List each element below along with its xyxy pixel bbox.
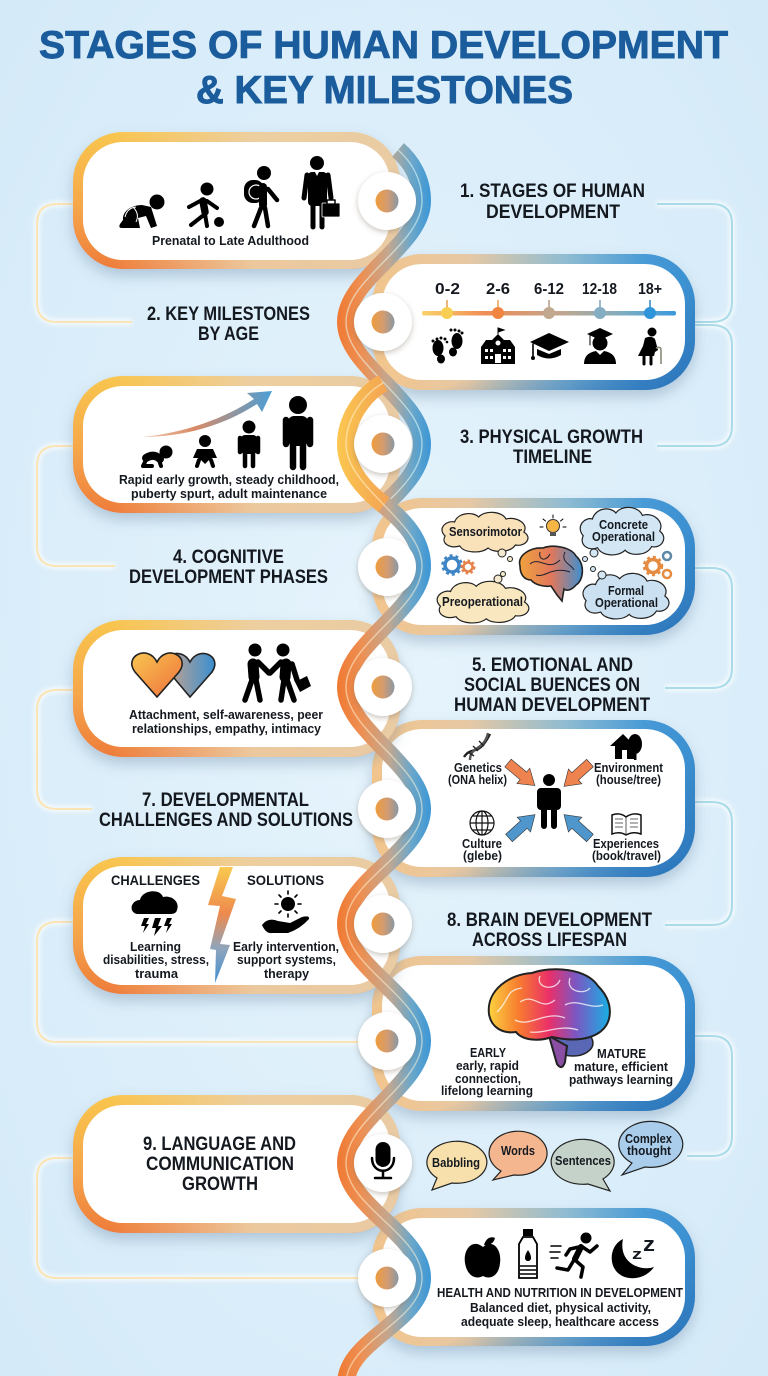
caption: Prenatal to Late Adulthood [152, 233, 309, 248]
bubble: babbling: Babbling [432, 1156, 480, 1170]
icon: moon and z [612, 1234, 655, 1278]
icon: elder with cane [638, 328, 661, 364]
arrows [502, 755, 597, 845]
icon: gears [442, 552, 671, 578]
icon: child with backpack [244, 166, 277, 226]
icon: handshake people [245, 644, 311, 700]
icon: runner [550, 1232, 597, 1277]
panel: influences [448, 733, 664, 863]
panel: emotional and social: relationships, empathy, intimacy [132, 721, 322, 736]
cloud: sensorimotor: Sensorimotor [449, 525, 522, 539]
heading: 4 cognitive development phases: DEVELOPMENT PHASES [129, 566, 328, 588]
icon: brain [520, 546, 582, 601]
icon: sun and hand [262, 891, 309, 933]
panel frames left [73, 132, 400, 1233]
panel: challenges and solutions: support systems, [237, 952, 336, 967]
text: Attachment, self-awareness, peer [129, 707, 323, 722]
heading: 1 stages of human development: DEVELOPMENT [486, 201, 620, 223]
heading: 5 emotional and social: 5. EMOTIONAL AND [472, 654, 633, 676]
icon: person [537, 774, 561, 826]
panel: influences: (glebe) [463, 849, 502, 863]
icon: graduation cap [530, 333, 569, 360]
heading: 3 physical growth timeline: TIMELINE [513, 446, 592, 468]
arrow: growth [142, 391, 272, 437]
bubble: words: Words [501, 1144, 535, 1158]
heading: 9 language and communication growth: 9. LANGUAGE AND [143, 1133, 296, 1155]
text: HEALTH AND NUTRITION IN DEVELOPMENT [437, 1285, 683, 1300]
heading: 2 key milestones by age: BY AGE [198, 323, 259, 345]
heading: 5 emotional and social [454, 654, 650, 716]
connector lines [37, 204, 732, 1278]
icon: lightbulb [540, 515, 566, 536]
cloud: preoperational [437, 581, 529, 623]
speech bubbles: language growth [427, 1121, 683, 1191]
panel: influences: (house/tree) [596, 773, 661, 787]
panel: influences: Culture [462, 837, 502, 851]
panel: stages icons [119, 156, 340, 248]
icon: child [240, 420, 258, 466]
heading: 8 brain development: 8. BRAIN DEVELOPMENT [447, 909, 652, 931]
cloud: concrete operational [580, 507, 664, 555]
panel: brain development: connection, [455, 1072, 521, 1086]
icon: thought bubbles [494, 549, 606, 583]
icon: graduate [584, 328, 616, 364]
panel: cognitive phases [437, 507, 671, 623]
labels: EARLY [470, 1046, 507, 1060]
bubble: words [489, 1131, 547, 1180]
panel: influences: (book/travel) [592, 849, 661, 863]
panel: challenges and solutions [103, 867, 339, 983]
heading: 9 language and communication growth: COMMUNICATION [146, 1153, 294, 1175]
icon: school [481, 328, 515, 364]
heading: 5 emotional and social: SOCIAL BUENCES ON [464, 674, 640, 696]
panel: health and nutrition: Balanced diet, physical activity, [470, 1300, 651, 1315]
icon: baby [193, 435, 217, 466]
panel: brain development: early, rapid [456, 1059, 519, 1073]
cloud: concrete operational: Operational [592, 530, 655, 544]
bubble: babbling [427, 1141, 487, 1190]
heading: 8 brain development: ACROSS LIFESPAN [472, 929, 627, 951]
icon: colourful brain [489, 969, 610, 1067]
icon: apple [465, 1237, 500, 1277]
age labels [435, 281, 662, 298]
panel: challenges and solutions: SOLUTIONS [247, 872, 324, 888]
panel: health and nutrition: adequate sleep, healthcare access [461, 1314, 659, 1329]
heading: 1 stages of human development [460, 180, 645, 223]
cloud: formal operational: Operational [595, 596, 658, 610]
title [39, 24, 728, 112]
heading: 7 developmental challenges: 7. DEVELOPMENTAL [142, 789, 309, 811]
cloud: concrete operational: Concrete [599, 518, 648, 532]
cloud: formal operational [583, 573, 669, 619]
heading: 2 key milestones by age [147, 303, 310, 345]
icon: moon and z: z [632, 1246, 642, 1263]
age labels: 6-12 [534, 281, 564, 298]
panel: physical growth [119, 391, 339, 501]
icon: moon and z: z [643, 1234, 655, 1256]
timeline bar [422, 300, 676, 319]
heading: 7 developmental challenges: CHALLENGES AND SOLUTIONS [99, 809, 353, 831]
panel: challenges and solutions: Learning [130, 939, 181, 954]
bubble: complex thought: thought [627, 1144, 672, 1158]
icon: house and tree [610, 734, 642, 760]
icon: globe [470, 811, 494, 835]
cloud: preoperational: Preoperational [442, 595, 523, 609]
panel: challenges and solutions: Early intervention, [233, 939, 339, 954]
panel: challenges and solutions: disabilities, stress, [103, 952, 209, 967]
panel: physical growth: puberty spurt, adult maintenance [131, 486, 327, 501]
panel: brain development: mature, efficient [574, 1060, 669, 1074]
bubble: sentences: Sentences [555, 1154, 611, 1168]
timeline nodes [354, 172, 416, 1307]
icon: adult [286, 396, 310, 467]
age labels: 0-2 [435, 281, 460, 298]
icon: adult with briefcase [304, 156, 340, 227]
labels: Genetics [454, 761, 502, 775]
bubble: complex thought [619, 1121, 683, 1175]
heading: 9 language and communication growth [143, 1133, 296, 1195]
heading: 4 cognitive development phases: 4. COGNITIVE [173, 546, 284, 568]
icon: crawler [143, 446, 172, 466]
panel: influences: (ONA helix) [448, 773, 507, 787]
panel: influences: Experiences [593, 837, 659, 851]
age labels: 18+ [638, 281, 662, 298]
bubble: sentences [551, 1139, 614, 1191]
panel frames right [372, 254, 695, 1346]
panel: challenges and solutions: therapy [264, 966, 310, 981]
icon: lightning bolt [208, 867, 236, 983]
icon: microphone [372, 1142, 394, 1178]
cloud: sensorimotor [442, 512, 528, 552]
heading: 9 language and communication growth: GROWTH [182, 1173, 258, 1195]
icon: storm cloud [132, 891, 178, 936]
icon: crawling baby [119, 194, 164, 228]
icon: child with ball [189, 182, 224, 227]
age labels: 12-18 [582, 281, 617, 298]
heading: 5 emotional and social: HUMAN DEVELOPMENT [454, 694, 650, 716]
panel: health and nutrition [437, 1229, 683, 1329]
panel: challenges and solutions: trauma [135, 966, 179, 981]
panel: emotional and social [129, 644, 323, 736]
icon: dna [464, 733, 490, 760]
heading: 3 physical growth timeline [460, 426, 643, 468]
panel: brain development [441, 969, 673, 1098]
heading: 3 physical growth timeline: 3. PHYSICAL GROWTH [460, 426, 643, 448]
icon: water bottle [519, 1229, 537, 1278]
panel: age timeline [422, 281, 676, 364]
heading: 4 cognitive development phases [129, 546, 328, 588]
panel: influences: Environment [594, 761, 664, 775]
age labels: 2-6 [486, 281, 510, 298]
icon: book [612, 814, 641, 835]
heading: 2 key milestones by age: 2. KEY MILESTONES [147, 303, 310, 325]
panel: brain development: MATURE [597, 1047, 646, 1061]
ribbon helix [346, 150, 422, 1376]
icon: hearts [132, 653, 215, 697]
title: & KEY MILESTONES [196, 69, 573, 112]
bubble: complex thought: Complex [625, 1132, 672, 1146]
icon: footprints [432, 328, 464, 364]
labels: CHALLENGES [111, 872, 200, 888]
cloud: formal operational: Formal [608, 584, 644, 598]
panel: brain development: pathways learning [569, 1073, 673, 1087]
text: Rapid early growth, steady childhood, [119, 472, 339, 487]
panel: brain development: lifelong learning [441, 1084, 533, 1098]
heading: 1 stages of human development: 1. STAGES OF HUMAN [460, 180, 645, 202]
heading: 7 developmental challenges [99, 789, 353, 831]
heading: 8 brain development [447, 909, 652, 951]
title: STAGES OF HUMAN DEVELOPMENT [39, 24, 728, 67]
